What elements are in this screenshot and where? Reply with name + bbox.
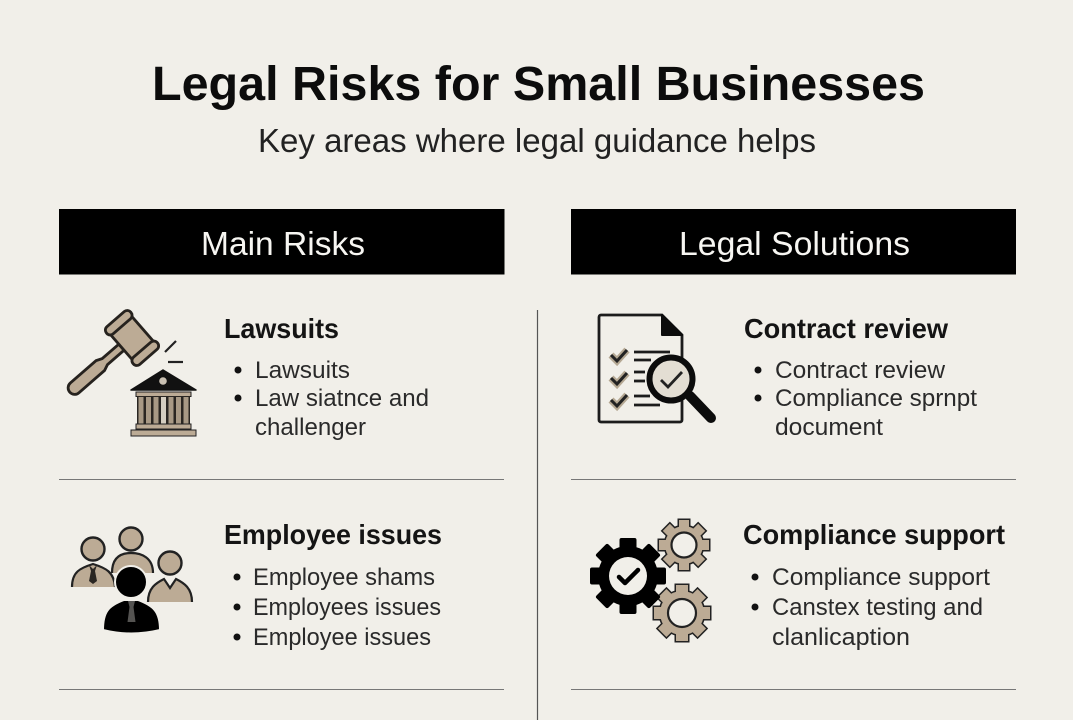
list: contract review: document	[775, 414, 883, 441]
heading: lawsuits: Lawsuits	[224, 313, 339, 344]
icon: checklist with magnifier	[599, 315, 711, 422]
header: main risks	[59, 209, 504, 274]
list: contract review: Contract review	[775, 357, 946, 384]
icon: gavel and courthouse	[53, 309, 196, 436]
list: lawsuits: challenger	[255, 414, 366, 441]
list: employee issues: Employees issues	[253, 594, 441, 621]
block: compliance support	[743, 519, 1005, 651]
icon: gears	[590, 520, 710, 641]
title: Legal Risks for Small Businesses	[152, 58, 925, 111]
list: lawsuits: Lawsuits	[255, 357, 350, 384]
block: employee issues	[224, 519, 442, 651]
list: compliance support: clanlicaption	[772, 624, 910, 651]
list: employee issues: Employee shams	[253, 564, 435, 591]
list: contract review	[754, 357, 977, 441]
list: compliance support	[752, 564, 990, 651]
block: contract review	[744, 313, 977, 441]
header: legal solutions: Legal Solutions	[679, 225, 910, 262]
header: main risks: Main Risks	[201, 225, 365, 262]
subtitle: Key areas where legal guidance helps	[258, 122, 816, 159]
list: lawsuits	[234, 357, 429, 441]
list: employee issues: Employee issues	[253, 624, 431, 651]
heading: compliance support: Compliance support	[743, 519, 1005, 550]
list: employee issues	[234, 564, 441, 651]
list: compliance support: Canstex testing and	[772, 594, 983, 621]
icon: group of people	[72, 528, 192, 634]
list: contract review: Compliance sprnpt	[775, 385, 977, 412]
list: compliance support: Compliance support	[772, 564, 990, 591]
header: legal solutions	[571, 209, 1016, 274]
heading: contract review: Contract review	[744, 313, 948, 344]
list: lawsuits: Law siatnce and	[255, 385, 429, 412]
block: lawsuits	[224, 313, 429, 441]
heading: employee issues: Employee issues	[224, 519, 442, 550]
